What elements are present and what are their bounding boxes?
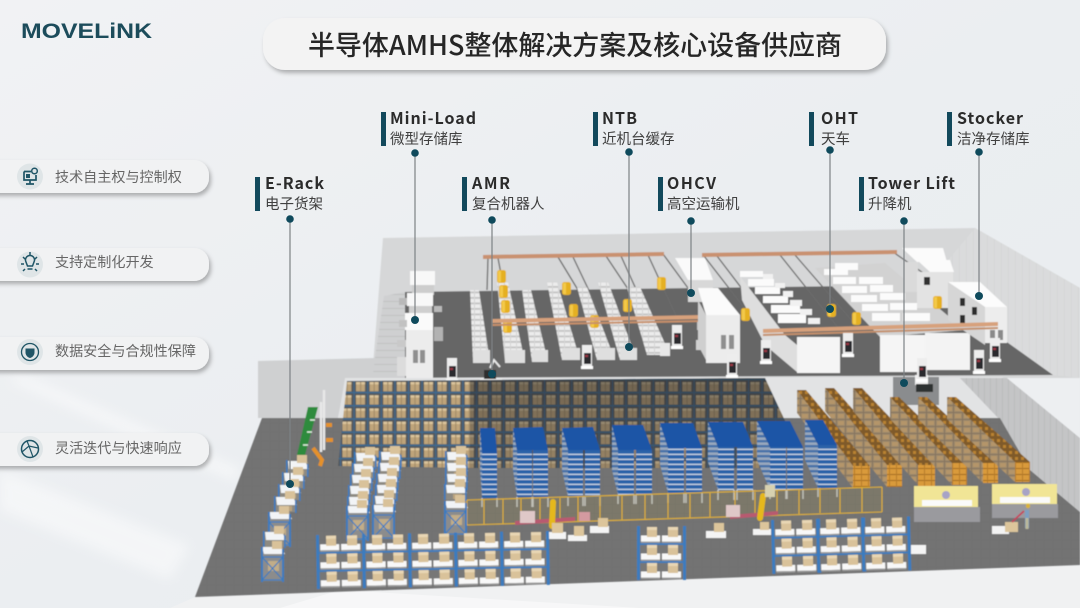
callout: E-Rack: E-Rack	[265, 170, 324, 194]
worker with pallet jack	[992, 504, 1030, 534]
upper level walls	[372, 228, 1080, 378]
long brown racks	[797, 388, 1030, 488]
callout: Tower Lift	[859, 170, 955, 387]
callout: E-Rack	[255, 170, 324, 488]
callout: Tower Lift: Tower Lift	[868, 170, 955, 194]
callout: NTB: 近机台缓存	[602, 131, 674, 148]
tan carton grid	[338, 378, 787, 468]
mini-load towers	[397, 271, 443, 378]
blue racks	[480, 420, 837, 507]
callout: AMR: 复合机器人	[472, 195, 544, 213]
callout: Tower Lift: 升降机	[868, 196, 912, 213]
callout: OHT: OHT	[821, 105, 858, 129]
advantage: customised development	[0, 248, 209, 281]
loose pallets	[546, 518, 926, 554]
amr robots	[446, 325, 1001, 385]
lower rail right	[741, 296, 998, 336]
stocker units	[902, 248, 1007, 345]
yellow packing robots	[515, 485, 778, 526]
advantage: customised development: 支持定制化开发	[55, 254, 154, 270]
lower level floor	[195, 418, 1080, 597]
callout: E-Rack: 电子货架	[265, 196, 323, 213]
callout: AMR: AMR	[471, 170, 510, 194]
lower rail left	[492, 315, 703, 326]
green conveyor and robots	[297, 390, 333, 466]
yellow oht vehicles left	[497, 270, 666, 333]
packing stations	[914, 484, 1058, 522]
callout: NTB: NTB	[602, 105, 637, 129]
white ntb rows	[470, 282, 670, 363]
orange rails right	[702, 250, 998, 332]
lower level walls	[258, 358, 1080, 512]
callout: Stocker	[947, 105, 1030, 300]
cabin towers center	[675, 258, 740, 363]
callout: OHT	[809, 105, 858, 313]
callout: NTB	[593, 105, 674, 351]
upper level floor	[372, 285, 1053, 378]
panel: advantages list	[0, 160, 209, 466]
callout: Mini-Load: 微型存储库	[390, 131, 462, 148]
title	[263, 18, 886, 70]
advantage: data security	[0, 337, 209, 370]
callout: OHCV	[658, 170, 740, 297]
callout: Mini-Load: Mini-Load	[390, 105, 476, 129]
callout: OHCV: 高空运输机	[667, 196, 740, 213]
advantage: agile iteration: 灵活迭代与快速响应	[55, 440, 182, 456]
tower lift	[893, 375, 939, 405]
factory scene	[195, 228, 1080, 597]
callout: OHCV: OHCV	[667, 170, 716, 194]
yellow safety fence	[467, 487, 882, 525]
callout: Stocker: 洁净存储库	[957, 131, 1030, 148]
logo: MOVELiNK	[21, 20, 152, 43]
white stocker blocks	[740, 263, 970, 373]
title: 半导体AMHS整体解决方案及核心设备供应商	[308, 24, 842, 63]
callout: OHT: 天车	[821, 131, 850, 148]
callout: Mini-Load	[381, 105, 476, 324]
callout: AMR	[462, 170, 544, 378]
callout: Stocker: Stocker	[957, 105, 1023, 129]
e-rack stacks	[261, 446, 468, 582]
advantage: data security: 数据安全与合规性保障	[55, 343, 196, 359]
orange overhead rails left	[483, 252, 710, 322]
blue shelving bottom	[316, 516, 911, 589]
advantage: technology autonomy: 技术自主权与控制权	[55, 169, 182, 185]
advantage: agile iteration	[0, 433, 209, 466]
advantage: technology autonomy	[0, 160, 209, 193]
